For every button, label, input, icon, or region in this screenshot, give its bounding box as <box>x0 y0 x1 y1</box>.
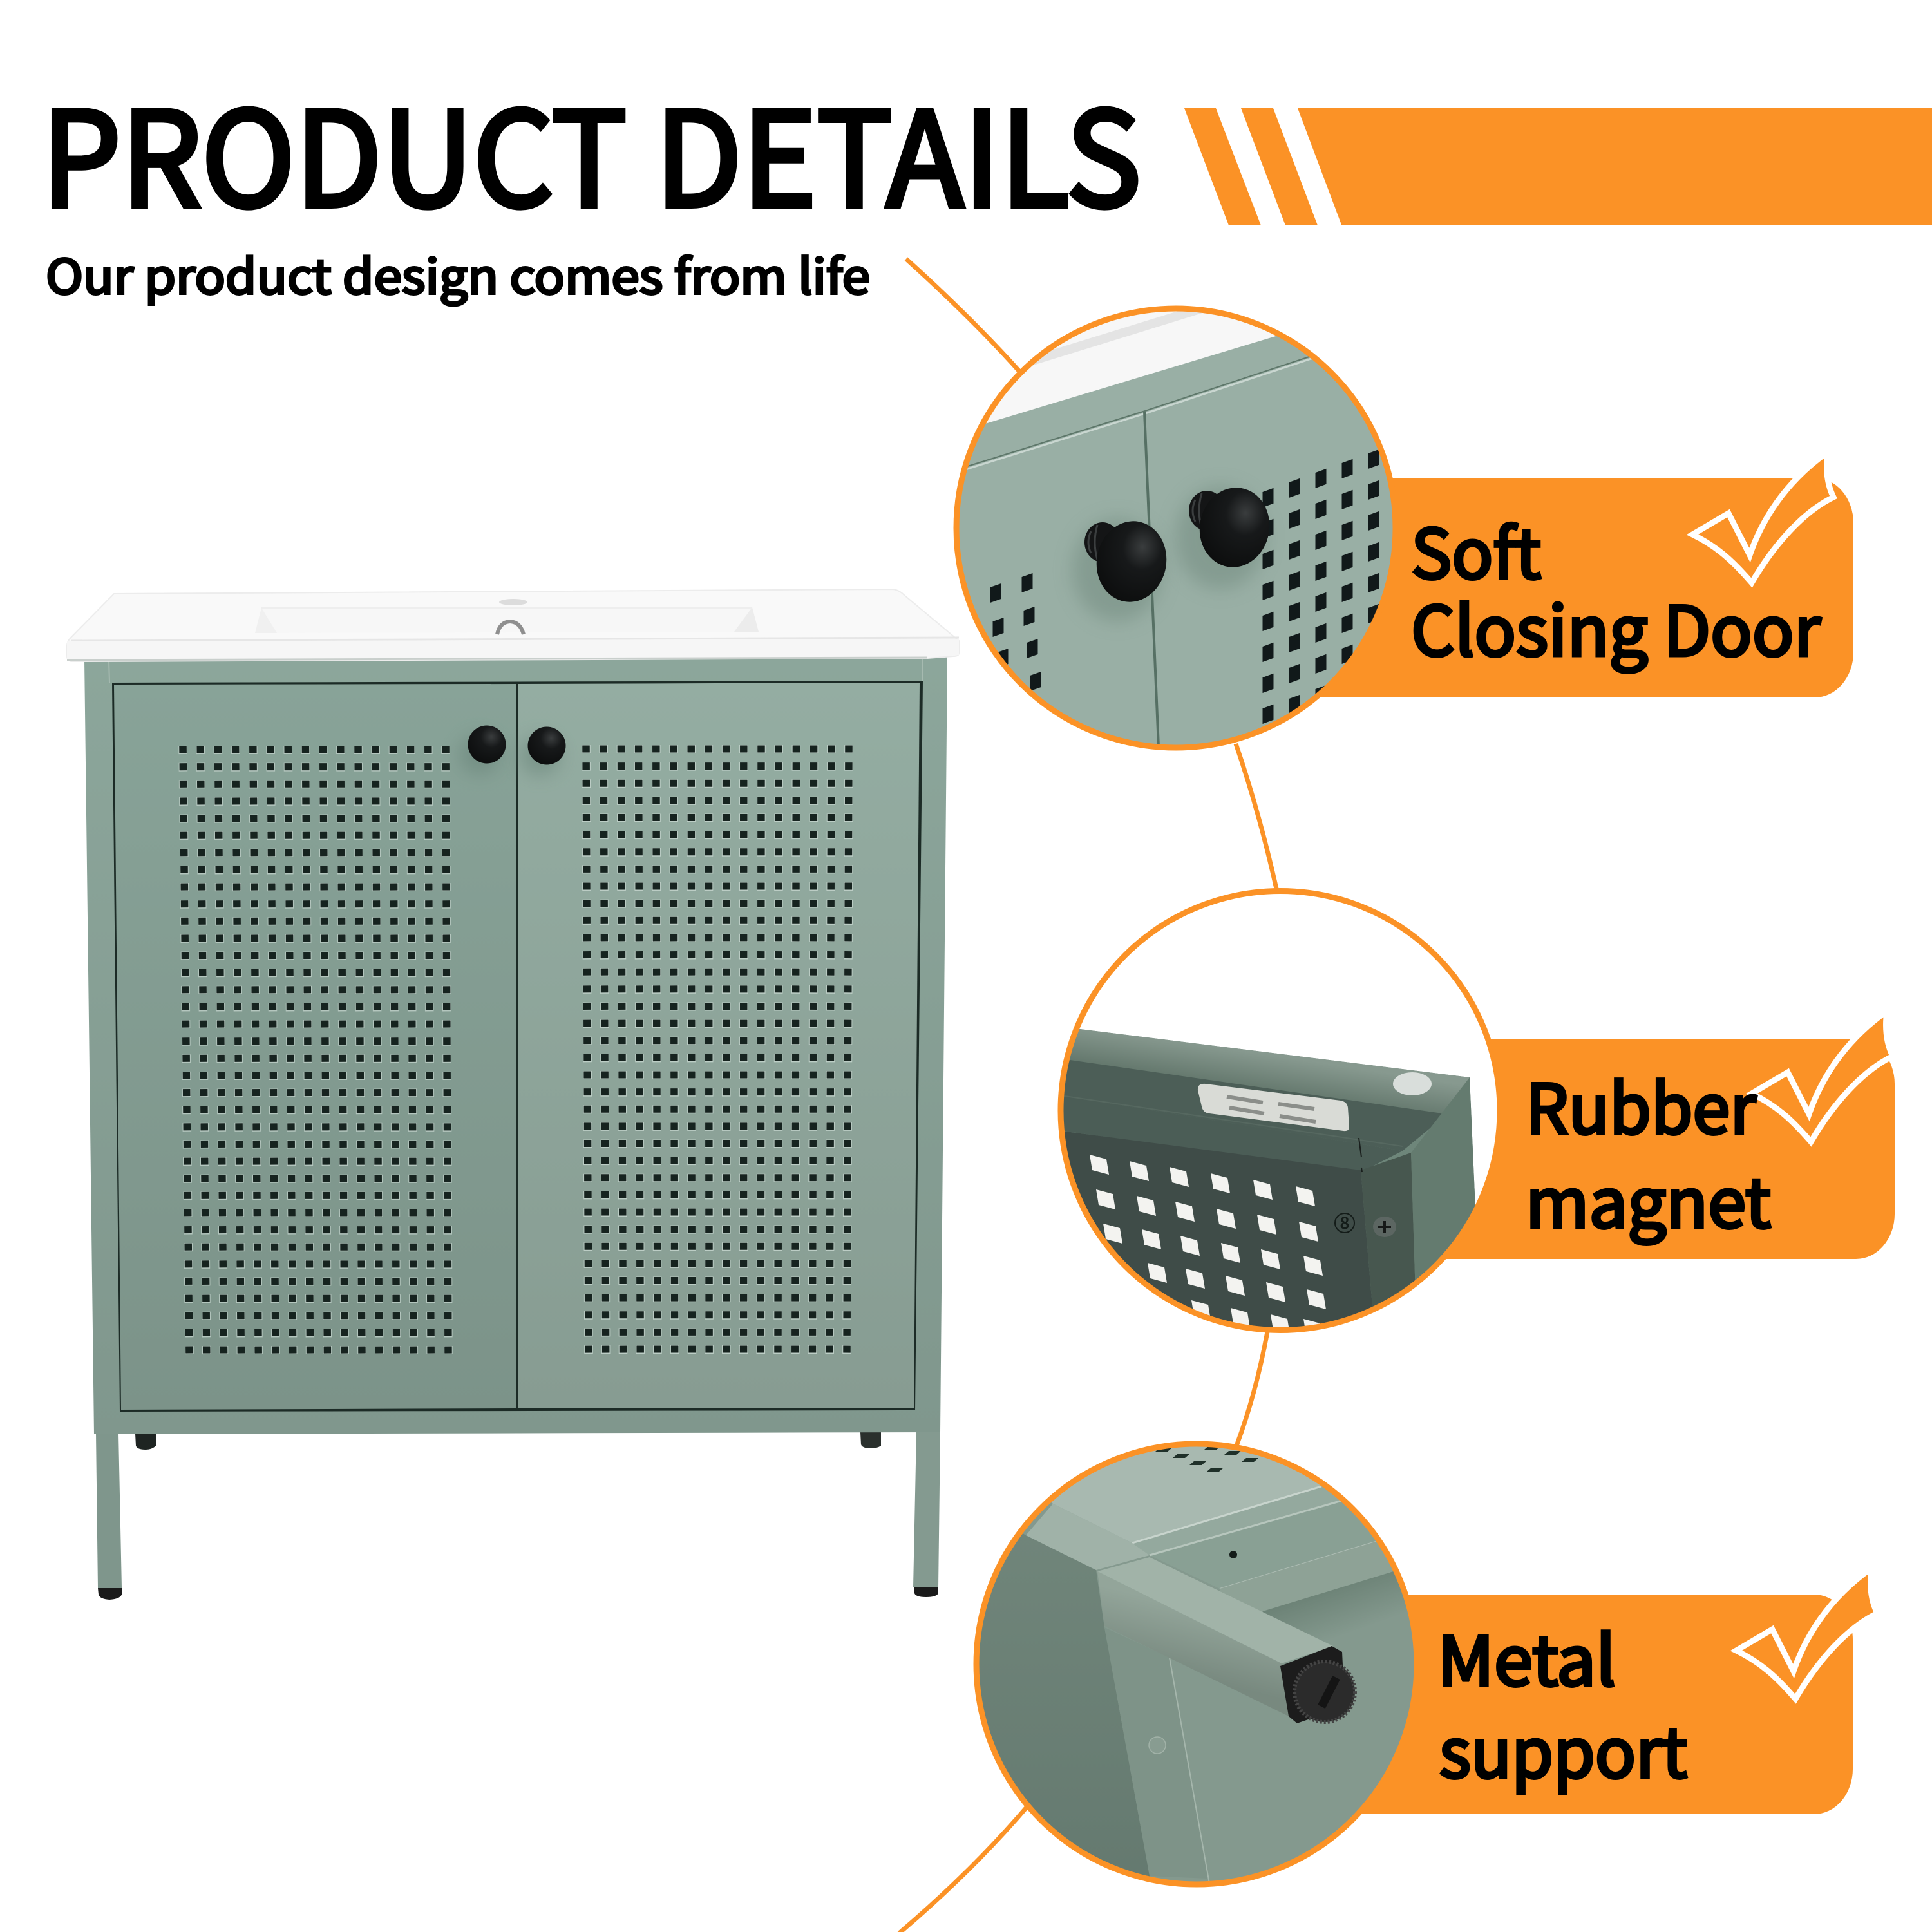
title: PRODUCT DETAILS <box>41 55 1141 244</box>
vanity cabinet product photo <box>67 589 959 1600</box>
label text: Metal <box>1437 1606 1616 1705</box>
right door <box>518 683 920 1408</box>
magnet catch plate <box>1198 1084 1349 1131</box>
right door perforations <box>586 745 849 1354</box>
cabinet frame <box>84 657 947 1434</box>
label text <box>1526 1054 1771 1247</box>
orange header banner with stripes <box>1184 108 1932 225</box>
label text: support <box>1439 1698 1687 1797</box>
icon: check mark <box>1736 1568 1877 1699</box>
detail circle: rubber magnet <box>1056 891 1500 1340</box>
detail circle: metal support leg <box>966 1436 1423 1900</box>
label text <box>1437 1606 1687 1797</box>
icon: check mark <box>1752 1011 1893 1142</box>
label text: Closing Door <box>1411 576 1821 676</box>
orange label box <box>1224 1595 1853 1814</box>
stamped number and screw: 8 <box>1340 1210 1350 1234</box>
cabinet legs and feet <box>96 1432 940 1600</box>
door knobs <box>459 725 565 775</box>
label: rubber magnet <box>1288 1011 1895 1259</box>
label text: magnet <box>1526 1148 1771 1247</box>
label text <box>1411 499 1821 676</box>
orange label box <box>1288 1039 1895 1259</box>
label text: Soft <box>1411 499 1541 598</box>
label text: Rubber <box>1526 1054 1757 1153</box>
stamped number and screw <box>1335 1210 1396 1237</box>
subtitle: Our product design comes from life <box>46 239 870 308</box>
icon: check mark <box>1692 452 1833 583</box>
door recess <box>112 681 923 1412</box>
orange label box <box>1159 478 1853 697</box>
left door <box>114 684 516 1410</box>
square leg tube <box>1097 1557 1333 1716</box>
left door perforations <box>183 746 448 1354</box>
black leveling foot <box>1280 1646 1355 1723</box>
ceramic basin countertop <box>67 589 959 661</box>
detail circle: door knobs <box>953 305 1393 751</box>
rubber bumper <box>1393 1072 1432 1095</box>
label: metal support <box>1224 1568 1877 1814</box>
connector lines between circles <box>899 259 1276 1932</box>
label: soft closing door <box>1159 452 1853 697</box>
